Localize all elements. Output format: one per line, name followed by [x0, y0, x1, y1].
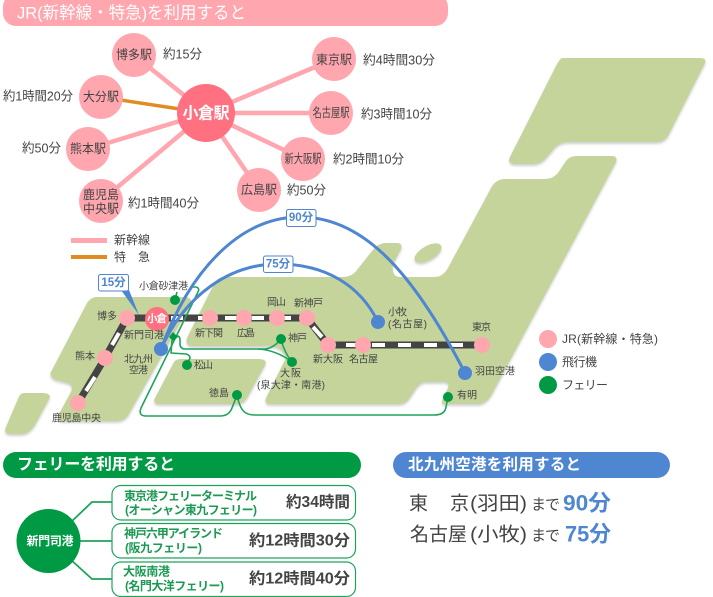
ferry row: Tokyo: 約34時間: [286, 493, 350, 511]
station: Oita: 約1時間20分: [3, 88, 73, 104]
line: Tokyo: まで: [531, 496, 560, 514]
line: Nagoya: まで: [531, 528, 560, 544]
diagram: JR times from Kokura station: [3, 33, 435, 223]
map stations: airports: [154, 315, 472, 380]
line: Nagoya: [410, 522, 611, 546]
map marker: Kokura: 小倉: [147, 312, 168, 325]
ferry row: Kobe: [112, 524, 356, 558]
callout: 15 minutes: 15分: [101, 275, 126, 289]
panel: ferry routes: [16, 486, 356, 596]
ferry row: Osaka: [112, 562, 356, 596]
map labels: 新大阪: [313, 352, 343, 366]
station: Oita: [3, 75, 123, 119]
ferry row: Osaka: 大阪南港: [123, 564, 170, 578]
line: Tokyo: 90分: [563, 490, 611, 516]
line: Nagoya: 75分: [565, 522, 611, 546]
station: Hakata: 約15分: [163, 46, 202, 62]
callout: 75 minutes: 75分: [266, 256, 291, 270]
map labels: [52, 280, 515, 424]
map: Japan landmasses: [5, 58, 705, 434]
station: Kagoshima-Chuo: 鹿児島: [83, 187, 119, 202]
hub: Kokura station: [177, 84, 235, 142]
station: Kumamoto: 約50分: [22, 140, 61, 156]
station: Shin-Osaka: 新大阪駅: [284, 152, 322, 166]
ferry row: Osaka: (名門大洋フェリー): [125, 578, 224, 593]
map labels: 広島: [237, 326, 255, 340]
map labels: 羽田空港: [475, 366, 515, 378]
station: Hiroshima: 約50分: [287, 182, 326, 198]
ferry row: Tokyo: 東京港フェリーターミナル: [124, 488, 257, 503]
station: Hakata: 博多駅: [116, 47, 152, 62]
ferry row: Kobe: 約12時間30分: [249, 532, 351, 550]
air routes: [161, 217, 465, 373]
station: Hakata: [112, 33, 202, 77]
legend: line types: 特 急: [114, 249, 150, 264]
line: Nagoya: 名古屋: [410, 524, 467, 546]
line: Nagoya: (小牧): [470, 524, 527, 546]
map labels: 岡山: [267, 296, 286, 308]
station: Nagoya: 約3時間10分: [361, 106, 432, 122]
station: Kagoshima-Chuo: [79, 179, 199, 223]
map labels: (泉大津・南港): [257, 378, 325, 392]
heading: Kitakyushu airport: [393, 452, 670, 478]
line: Tokyo: 京: [450, 492, 469, 514]
legend: line types: [71, 232, 150, 264]
heading: JR: JR(新幹線・特急)を利用すると: [17, 4, 246, 22]
map labels: 松山: [194, 358, 213, 372]
map labels: 有明: [457, 388, 477, 402]
station: Shin-Osaka: [281, 137, 404, 181]
map labels: 空港: [129, 364, 148, 376]
callout: 75 minutes: [264, 256, 293, 272]
map labels: 名古屋: [349, 352, 378, 366]
map labels: 熊本: [75, 350, 95, 362]
ferry row: Tokyo: (オーシャン東九フェリー): [125, 502, 257, 517]
hub: Shinmoji port: 新門司港: [26, 533, 74, 548]
station: Nagoya: 名古屋駅: [312, 105, 350, 120]
station: Tokyo: 東京駅: [316, 53, 352, 67]
map labels: 小倉砂津港: [139, 280, 188, 292]
station: Kagoshima-Chuo: 約1時間40分: [128, 196, 199, 210]
heading: ferry: フェリーを利用すると: [17, 456, 175, 474]
map labels: 神戸: [288, 332, 307, 344]
map labels: 徳島: [209, 386, 229, 400]
hub: Kokura station: 小倉駅: [182, 104, 230, 122]
ferry routes: [140, 287, 448, 416]
station: Kagoshima-Chuo: 中央駅: [83, 201, 119, 216]
ferry row: Kobe: (阪九フェリー): [125, 541, 202, 555]
callout: 15 minutes: [98, 274, 139, 315]
legend: line types: 新幹線: [114, 232, 150, 247]
hub: Shinmoji port: [16, 509, 80, 573]
ferry row: Osaka: 約12時間40分: [249, 570, 351, 588]
map labels: 博多: [97, 310, 117, 322]
map labels: 大阪: [280, 366, 301, 380]
map marker: Kokura: [145, 307, 169, 331]
heading: Kitakyushu airport: 北九州空港を利用すると: [408, 454, 581, 474]
legend: transport types: [539, 330, 658, 394]
station: Oita: 大分駅: [83, 90, 119, 104]
map labels: 新門司港: [124, 330, 164, 342]
station: Hiroshima: [237, 168, 326, 212]
legend: transport types: JR(新幹線・特急): [562, 331, 658, 346]
heading: JR: [3, 0, 448, 26]
connectors: [70, 502, 112, 579]
station: Hiroshima: 広島駅: [241, 182, 277, 197]
map labels: 新神戸: [294, 296, 323, 310]
station: Tokyo: 約4時間30分: [363, 52, 435, 68]
station: Shin-Osaka: 約2時間10分: [333, 152, 404, 166]
line: Tokyo: [409, 490, 611, 516]
map stations: JR: [70, 310, 490, 411]
station: Nagoya: [309, 91, 432, 135]
map labels: (名古屋): [388, 318, 427, 330]
ferry row: Tokyo: [112, 486, 356, 520]
station: Tokyo: [312, 37, 435, 81]
heading: ferry: [3, 452, 361, 478]
map labels: 北九州: [124, 354, 153, 366]
station: Kumamoto: [22, 127, 110, 171]
map labels: 小牧: [388, 306, 407, 318]
legend: transport types: 飛行機: [562, 355, 597, 369]
ferry row: Kobe: 神戸六甲アイランド: [124, 526, 223, 540]
map labels: 東京: [472, 320, 491, 334]
station: Kumamoto: 熊本駅: [70, 142, 106, 156]
line: Tokyo: 東: [409, 492, 428, 514]
map labels: 新下関: [195, 328, 223, 340]
callout: 90 minutes: [286, 210, 316, 226]
callout: 90 minutes: 90分: [289, 210, 314, 224]
line: Tokyo: (羽田): [470, 494, 527, 514]
text block: airport times: [409, 490, 611, 546]
spokes from hub: [88, 55, 334, 201]
rail lines: [78, 318, 482, 403]
legend: transport types: フェリー: [562, 378, 608, 392]
map labels: 鹿児島中央: [52, 412, 101, 424]
map stations: ferry ports: [169, 295, 453, 402]
